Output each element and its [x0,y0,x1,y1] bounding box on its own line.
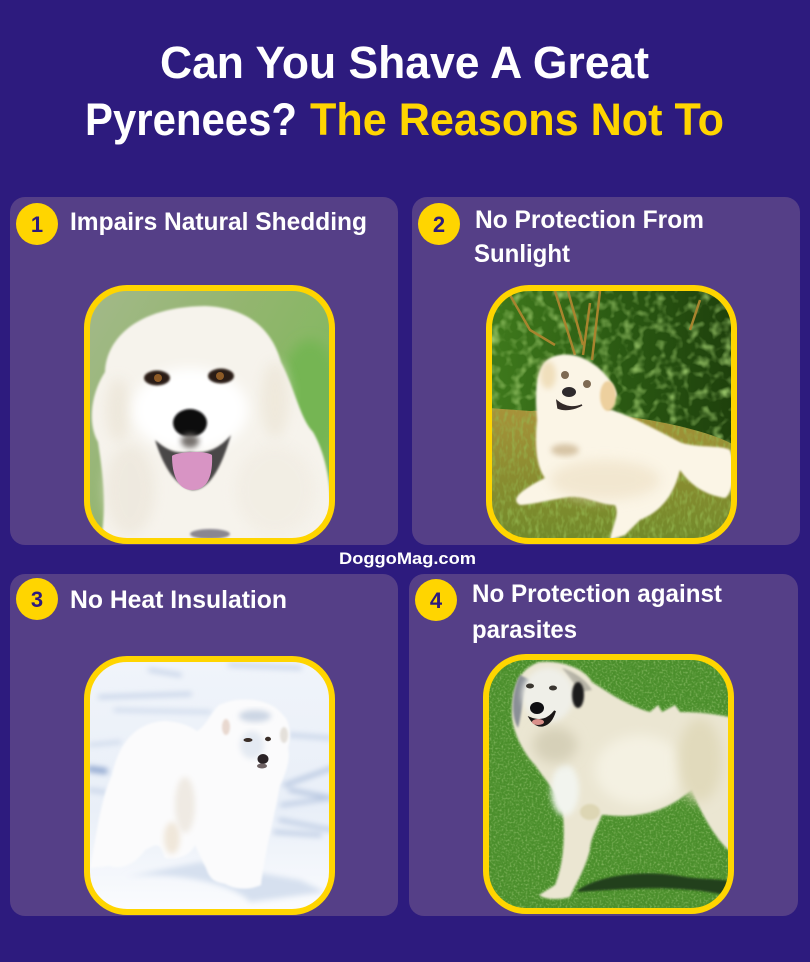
photo: white dog close-up on green [87,288,340,545]
number badge 4 [415,579,457,621]
panel 4 background [409,574,798,916]
heading 4: parasites [472,616,577,644]
panel: no protection from sunlight [412,197,800,545]
photo: dog sitting on grass by bushes [489,288,734,545]
number badge 2: 2 [433,212,445,237]
panel 1 background [10,197,398,545]
panel: no protection against parasites [409,574,798,916]
heading 1: Impairs Natural Shedding [70,208,367,236]
title: Pyrenees? [85,94,297,145]
heading 2: No Protection From [475,206,704,234]
title: Can You Shave A Great [160,37,649,88]
number badge 1 [16,203,58,245]
number badge 4: 4 [430,588,443,613]
photo: white dog in snow [87,659,332,912]
number badge 3: 3 [31,587,43,612]
heading 2 [474,206,704,268]
panel 2 background [412,197,800,545]
title [85,37,724,145]
heading 2: Sunlight [474,240,571,268]
panel: impairs natural shedding [10,197,398,545]
panel 3 background [10,574,398,916]
heading 3: No Heat Insulation [70,586,287,614]
number badge 1: 1 [31,212,43,237]
photo: dog standing on lawn [486,657,735,911]
number badge 2 [418,203,460,245]
number badge 3 [16,578,58,620]
heading 4: No Protection against [472,580,723,608]
panel: no heat insulation [10,574,398,916]
heading 4 [472,580,723,644]
title: The Reasons Not To [310,94,724,145]
site credit: DoggoMag.com [339,549,476,568]
